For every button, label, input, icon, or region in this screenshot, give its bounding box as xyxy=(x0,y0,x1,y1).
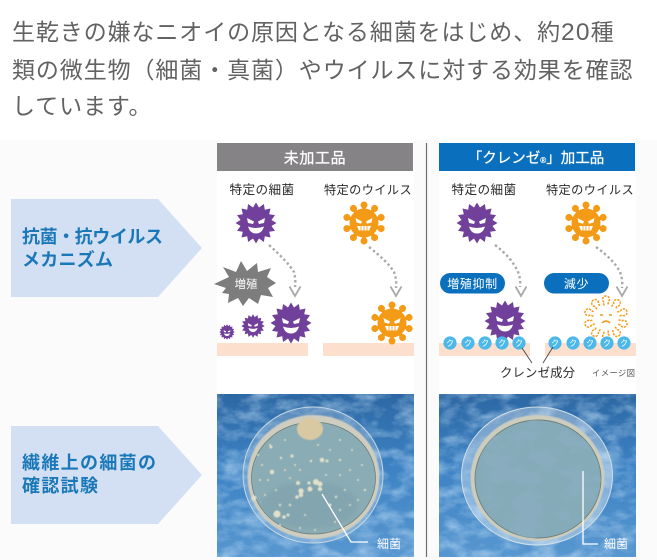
leader line and label: bacteria: 細菌 xyxy=(604,536,628,551)
pill: growth suppressed: 増殖抑制 xyxy=(447,276,498,291)
icon: medium bacterium xyxy=(241,314,265,338)
fabric surface: right xyxy=(323,343,414,356)
column divider xyxy=(426,143,428,557)
row label arrow: mechanism xyxy=(11,199,202,297)
icon: virus xyxy=(342,202,386,244)
infographic diagram xyxy=(11,143,636,557)
Cleanse component particles: left: ク xyxy=(498,339,506,348)
icon: large bacterium xyxy=(270,302,312,344)
pill: reduced xyxy=(544,273,609,294)
Cleanse component particles: left: ク xyxy=(515,339,523,348)
callout: growth burst: 増殖 xyxy=(234,278,258,291)
pill: reduced: 減少 xyxy=(564,276,589,291)
Cleanse component particles: right: ク xyxy=(603,339,611,348)
arrow: virus falls to fabric xyxy=(596,247,628,296)
pill: growth suppressed xyxy=(440,273,505,294)
icon: small bacterium xyxy=(219,324,235,340)
label: specific virus: 特定のウイルス xyxy=(324,182,412,197)
row label arrow: mechanism: メカニズム xyxy=(22,249,113,270)
intro text xyxy=(12,19,633,119)
Cleanse component particles: left: ク xyxy=(481,339,489,348)
row label arrow: confirmation on fibers: 確認試験 xyxy=(22,476,98,496)
icon: bacterium xyxy=(236,202,276,244)
intro text: 生乾きの嫌なニオイの原因となる細菌をはじめ、約20種 xyxy=(12,19,615,46)
leader lines to component label xyxy=(522,347,553,363)
bacteria colonies xyxy=(252,439,366,531)
label: specific bacteria: 特定の細菌 xyxy=(452,183,516,197)
arrow: virus falls to fabric xyxy=(369,247,402,296)
dish xyxy=(462,407,612,545)
fabric surface: left xyxy=(439,343,530,356)
label: specific virus: 特定のウイルス xyxy=(546,182,634,197)
Cleanse component particles: left: ク xyxy=(446,339,454,348)
leader line and label: bacteria xyxy=(322,494,401,551)
dish xyxy=(243,407,383,543)
intro text: 類の微生物（細菌・真菌）やウイルスに対する効果を確認 xyxy=(12,57,633,83)
Cleanse component particles: right: ク xyxy=(569,339,577,348)
arrow: bacterium falls to fabric xyxy=(495,245,526,296)
icon: broken virus xyxy=(584,296,628,340)
Cleanse component particles: right: ク xyxy=(620,339,628,348)
Cleanse component particles: right: ク xyxy=(586,339,594,348)
row label arrow: confirmation on fibers: 繊維上の細菌の xyxy=(22,453,156,473)
Cleanse component particles: left xyxy=(443,336,526,350)
fabric surface: left xyxy=(217,343,308,356)
photo: treated petri dish xyxy=(439,394,636,557)
row label arrow: mechanism: 抗菌・抗ウイルス xyxy=(22,227,163,247)
heading: treated xyxy=(439,143,635,171)
leader line and label: bacteria: 細菌 xyxy=(377,536,401,551)
label: specific bacteria: 特定の細菌 xyxy=(230,183,294,197)
intro text: しています。 xyxy=(12,93,152,119)
arrow: bacterium falls to fabric xyxy=(269,245,300,296)
large colony at top of dish xyxy=(297,418,323,440)
icon: virus xyxy=(564,202,608,244)
icon: bacterium xyxy=(456,202,498,244)
Cleanse component particles: left: ク xyxy=(464,339,472,348)
panel: Cleanse treated mechanism xyxy=(439,143,636,380)
row label arrow: confirmation on fibers xyxy=(11,426,202,524)
icon: virus on fabric xyxy=(370,302,414,344)
photo: untreated petri dish xyxy=(217,394,414,557)
heading: untreated: 未加工品 xyxy=(284,150,346,167)
fabric surface: right xyxy=(545,343,636,356)
callout: growth burst xyxy=(214,261,276,306)
label: image diagram note: イメージ図 xyxy=(592,368,635,378)
icon: suppressed bacterium xyxy=(484,300,526,342)
panel: untreated mechanism xyxy=(214,143,414,356)
Cleanse component particles: right xyxy=(548,336,631,350)
leader line and label: bacteria xyxy=(583,471,628,551)
Cleanse component particles: right: ク xyxy=(551,339,559,348)
heading: untreated xyxy=(217,143,413,171)
heading: treated: 「クレンゼ®」加工品 xyxy=(468,150,604,167)
label: Cleanse component: クレンゼ成分 xyxy=(500,366,576,380)
